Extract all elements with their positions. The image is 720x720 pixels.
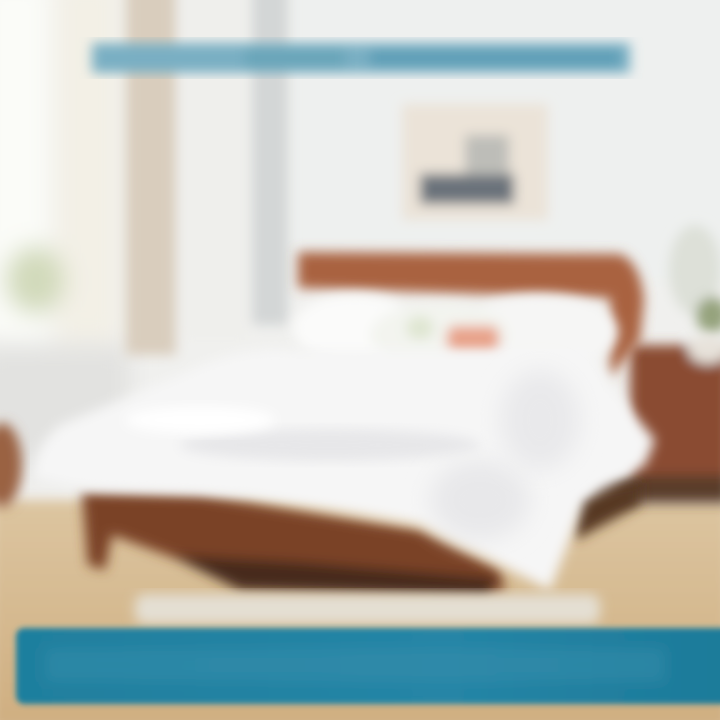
window with plant	[0, 0, 130, 475]
pillows	[293, 294, 618, 370]
bed frame	[82, 482, 640, 596]
wall picture	[402, 104, 548, 220]
headboard	[298, 252, 644, 378]
curtains	[126, 0, 288, 355]
nightstand	[590, 336, 720, 503]
rug	[135, 594, 600, 624]
top banner	[92, 43, 630, 73]
wall	[0, 0, 720, 540]
duvet	[34, 349, 655, 590]
left side chair	[0, 423, 22, 507]
bottom banner	[16, 628, 720, 704]
right plant	[669, 225, 720, 333]
floor	[0, 500, 720, 720]
accent pillow	[447, 326, 499, 354]
